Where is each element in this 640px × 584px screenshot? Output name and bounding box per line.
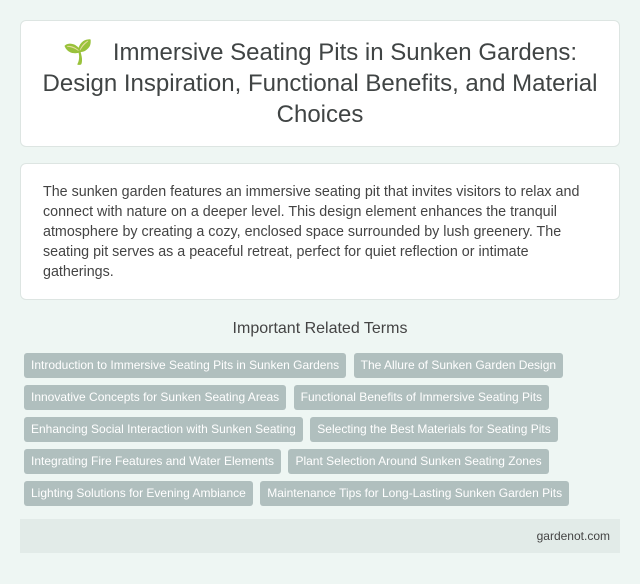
footer: gardenot.com [537, 529, 610, 543]
footer [20, 519, 620, 553]
title card [20, 20, 620, 147]
title card: Choices [277, 101, 363, 128]
tag list: Plant Selection Around Sunken Seating Zones [295, 454, 542, 468]
title card: 🌱 Immersive Seating Pits in Sunken Gardens: [63, 39, 577, 66]
heading: related terms: Important Related Terms [233, 320, 407, 337]
tag list: Introduction to Immersive Seating Pits in Sunken Gardens [31, 358, 339, 372]
tag list: Lighting Solutions for Evening Ambiance [31, 486, 246, 500]
tag list [24, 353, 569, 506]
description card: The sunken garden features an immersive seating pit that invites visitors to relax and connect with nature on a deeper level. This design element enhances the tranquil atmosphere by creating a cozy, enclosed space surrounded by lush greenery. The seating pit serves as a peaceful retreat, perfect for quiet reflection or intimate gatherings. [43, 184, 579, 280]
description card [20, 163, 620, 300]
title card: Design Inspiration, Functional Benefits, and Material [43, 70, 597, 97]
tag list: Functional Benefits of Immersive Seating Pits [301, 390, 542, 404]
tag list: Selecting the Best Materials for Seating Pits [317, 422, 551, 436]
tag list: The Allure of Sunken Garden Design [361, 358, 556, 372]
tag list: Maintenance Tips for Long-Lasting Sunken Garden Pits [267, 486, 562, 500]
tag list: Innovative Concepts for Sunken Seating Areas [31, 390, 279, 404]
tag list: Integrating Fire Features and Water Elements [31, 454, 274, 468]
tag list: Enhancing Social Interaction with Sunken Seating [31, 422, 296, 436]
